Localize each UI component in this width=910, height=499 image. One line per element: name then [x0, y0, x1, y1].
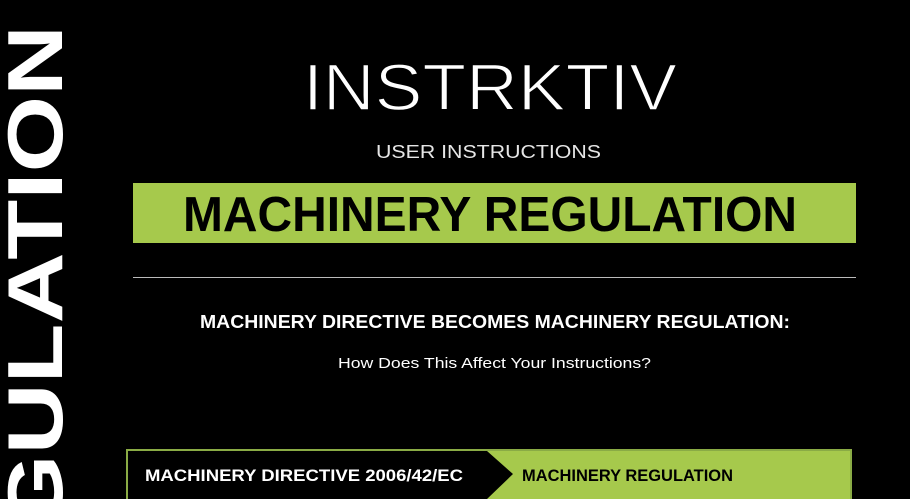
subtitle: user instructions: USER INSTRUCTIONS [376, 142, 601, 162]
left label: MACHINERY DIRECTIVE 2006/42/EC [145, 466, 463, 485]
heading: MACHINERY DIRECTIVE BECOMES MACHINERY REGULATION: [200, 312, 790, 332]
title banner: MACHINERY REGULATION [183, 188, 797, 242]
comparison bar [126, 449, 852, 499]
right label: MACHINERY REGULATION [522, 466, 733, 485]
right green segment with chevron [487, 451, 850, 499]
subheading: How Does This Affect Your Instructions? [338, 355, 651, 372]
